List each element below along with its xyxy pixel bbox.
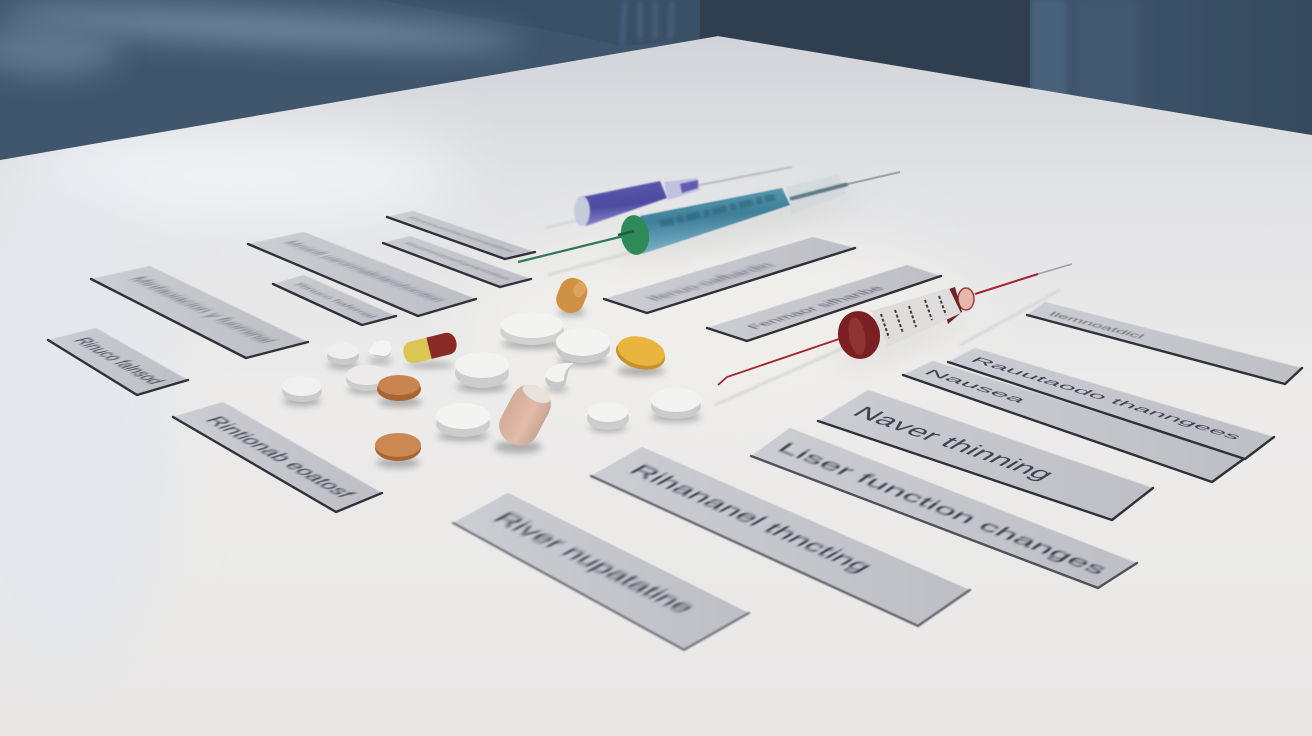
pill: yellow (613, 331, 669, 375)
label: left long (91, 266, 308, 358)
label: river nupatatine: River nupatatine (486, 509, 701, 617)
pill: white scored 3 (282, 376, 322, 402)
label: nausea (903, 361, 1245, 482)
pill: white 4 (455, 352, 509, 388)
pill: white chipped (368, 340, 392, 360)
label: far right (1027, 302, 1302, 384)
label: hormonal changes: Rauutaodo thanngees (967, 355, 1247, 442)
label: centre right back (707, 265, 941, 341)
label: back narrow lower: Rhmmmamehianarmotion (400, 242, 512, 281)
pill: white 1 (327, 343, 359, 365)
label: far left small (48, 328, 188, 395)
label: rihananel thncting: Rihananel thncting (623, 461, 879, 576)
label: back long (248, 232, 476, 316)
pill: orange upright (552, 274, 591, 317)
label: back narrow upper: Rinnnuemaoemrantlion (404, 216, 517, 253)
label: rihananel thncting (591, 447, 970, 626)
pill: white scored 2 (346, 365, 388, 391)
label: centre right back: Fenmaor sifhanbe (743, 285, 889, 331)
label: centre back (604, 237, 855, 313)
label: river nupatatine (453, 493, 749, 650)
purple syringe (574, 167, 792, 226)
label: far left small: Rinuco falnsod (68, 336, 169, 386)
pill: white 7 (436, 403, 490, 437)
capsule: large beige (493, 378, 557, 452)
label: centre back: Ifenuo-oafbardin (642, 261, 779, 302)
label: far right: Ilemnoatdicl (1046, 311, 1146, 340)
label: left long: Minfaoiacion y fuorninal (124, 275, 280, 345)
label: lower left (173, 402, 382, 512)
label: back narrow lower (383, 236, 531, 287)
capsule: yellow and red (401, 331, 459, 365)
label: back small: Rinuco hafernal (292, 282, 380, 319)
pill: orange 1 (377, 375, 421, 401)
label: back narrow upper (387, 211, 535, 259)
pill shadows (283, 308, 701, 468)
label: liver function changes (751, 428, 1137, 588)
label: hormonal changes (948, 348, 1274, 459)
label: lower left: Rintionab eoatosf (200, 414, 361, 500)
pill: white scored 9 (651, 388, 701, 419)
pill: white large 5 (500, 312, 564, 345)
pill: white 8 (587, 402, 629, 430)
label: back small (273, 275, 396, 325)
label: liver function changes: Liser function changes (772, 439, 1113, 578)
pill: white chip small (545, 363, 574, 389)
label: nausea: Nausea (920, 367, 1032, 404)
soft table shadows (611, 182, 969, 373)
label: back long: Mnonfl uaronmaliclanshorntion (280, 240, 450, 303)
pills (282, 274, 701, 468)
red vial syringe (718, 264, 1072, 385)
label: naver thinning (818, 390, 1153, 520)
blue syringe (518, 172, 900, 262)
pill: white large 6 (556, 328, 610, 363)
label: naver thinning: Naver thinning (847, 403, 1062, 483)
syringe reflections (545, 215, 1060, 405)
pill: orange 2 (375, 433, 421, 461)
